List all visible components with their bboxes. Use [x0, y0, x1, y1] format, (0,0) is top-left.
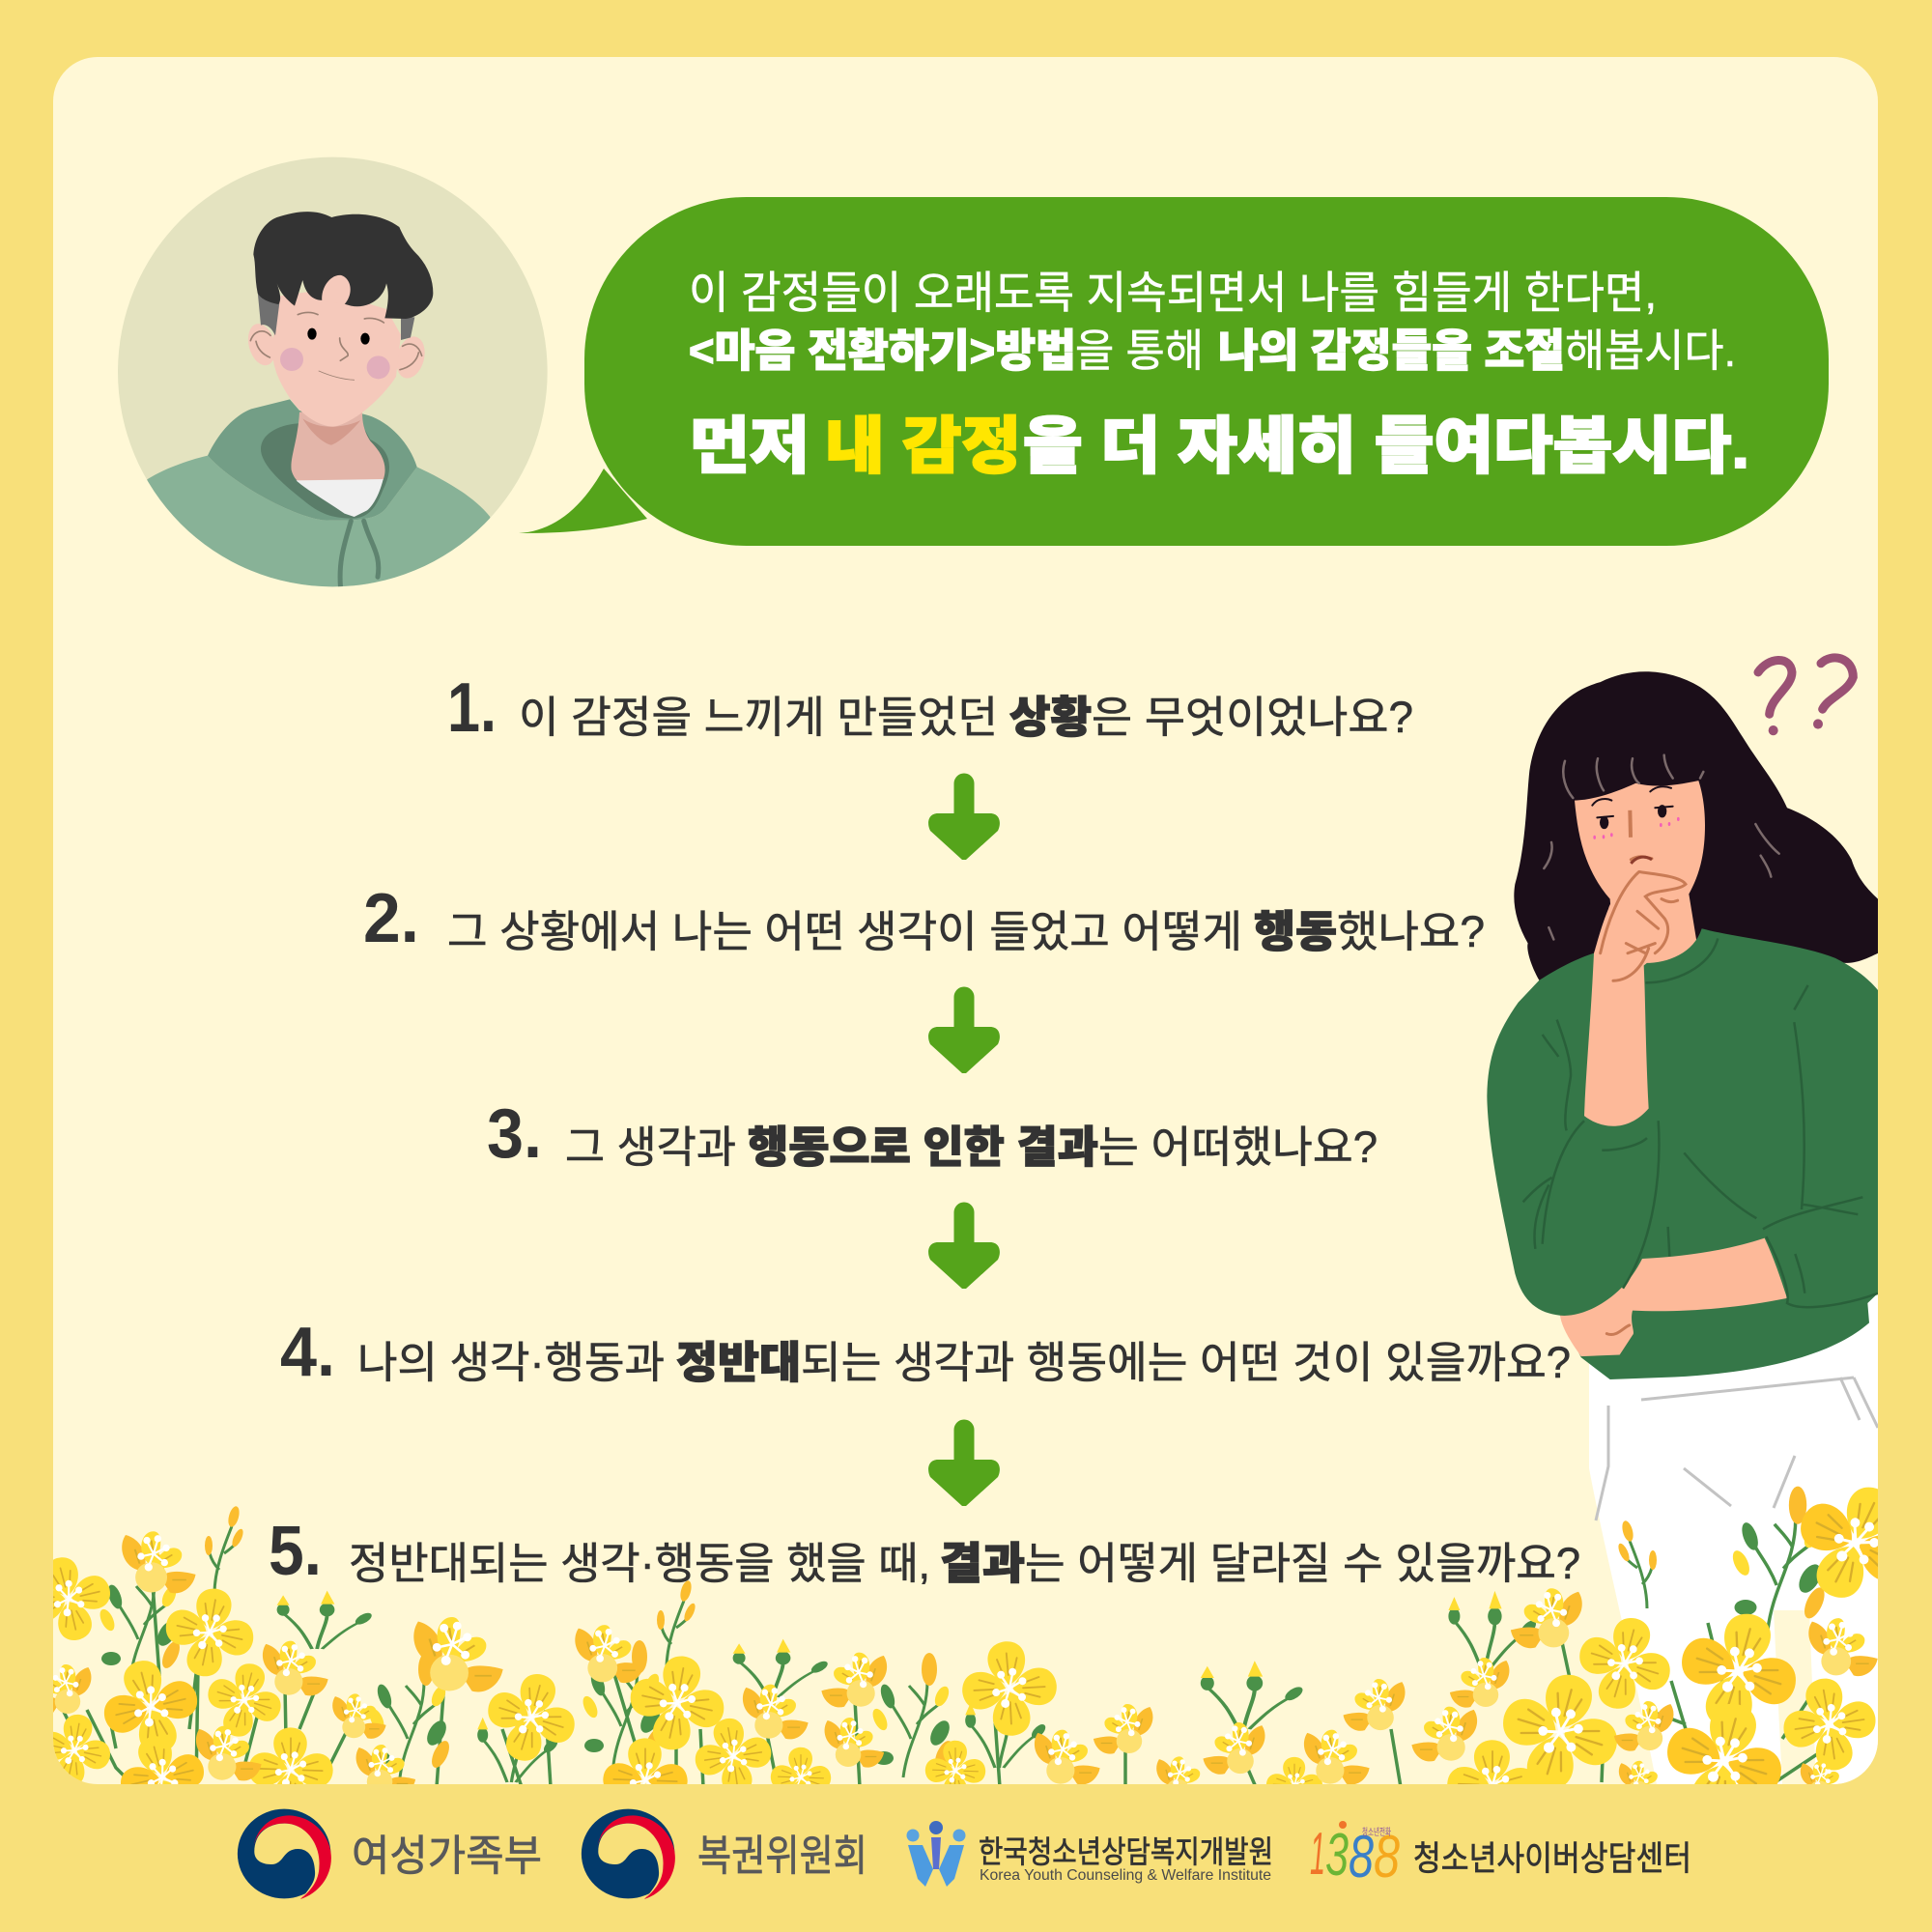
- flower field: [53, 1486, 1878, 1784]
- logo: 1388 청소년사이버상담센터: 8: [1349, 1824, 1374, 1890]
- logo: 1388 청소년사이버상담센터: 청소년전화: [1362, 1827, 1391, 1838]
- bubble line 3: 을 더 자세히 들여다봅시다.: [1023, 412, 1749, 481]
- logo: 여성가족부: 여성가족부: [352, 1833, 542, 1880]
- question 3: 행동으로 인한 결과: [748, 1122, 1098, 1172]
- question 2: 그 상황에서 나는 어떤 생각이 들었고 어떻게: [447, 907, 1242, 956]
- question 3: [487, 1095, 1378, 1173]
- bubble line 3: 먼저: [690, 412, 810, 481]
- woman's white trousers: [1589, 1294, 1878, 1784]
- stems: [62, 1592, 1816, 1784]
- question 1: 1.: [447, 669, 497, 747]
- logo: 한국청소년상담복지개발원: Korea Youth Counseling & Welfare Institute: [980, 1867, 1271, 1884]
- question 2: 했나요?: [1337, 907, 1485, 956]
- question 3: 3.: [487, 1095, 542, 1173]
- logo: 한국청소년상담복지개발원: [906, 1821, 1273, 1887]
- question 4: 정반대: [676, 1338, 801, 1387]
- question 1: 상황: [1009, 693, 1092, 742]
- logo: 여성가족부: [238, 1809, 542, 1899]
- question 4: 되는 생각과 행동에는 어떤 것이 있을까요?: [801, 1338, 1571, 1387]
- question 1: 이 감정을 느끼게 만들었던: [519, 693, 998, 742]
- logo: 1388 청소년사이버상담센터: 8: [1374, 1824, 1400, 1890]
- right flowers: [962, 1488, 1878, 1784]
- question 4: 나의 생각·행동과: [357, 1338, 665, 1387]
- question 4: 4.: [280, 1314, 335, 1391]
- left flowers: [16, 1531, 986, 1830]
- speech bubble: [519, 197, 1829, 546]
- woman figure: [1487, 671, 1878, 1379]
- question 4: [280, 1314, 1571, 1391]
- question 5: 5.: [269, 1513, 322, 1590]
- logo: 1388 청소년사이버상담센터: 1: [1310, 1821, 1325, 1888]
- arrow 3: [928, 1202, 1000, 1289]
- question 2: 2.: [363, 880, 419, 957]
- question 5: 결과: [940, 1539, 1025, 1588]
- sprigs: [97, 1487, 1829, 1782]
- arrow 1: [928, 773, 1000, 860]
- question 5: 는 어떻게 달라질 수 있을까요?: [1025, 1539, 1580, 1588]
- bubble line 2: <마음 전환하기>방법: [689, 326, 1076, 376]
- bubble line 3: 내 감정: [825, 412, 1021, 481]
- bubble line 2: 나의 감정들을 조절: [1218, 326, 1565, 376]
- question 2: 행동: [1254, 907, 1337, 956]
- bubble line 2: 해봅시다.: [1565, 326, 1736, 376]
- logo: 복권위원회: 복권위원회: [697, 1833, 867, 1880]
- question 5: [269, 1513, 1580, 1590]
- avatar: boy in green hoodie: [118, 157, 548, 592]
- arrow 4: [928, 1420, 1000, 1506]
- logo: 1388 청소년사이버상담센터: [1310, 1821, 1691, 1890]
- question 2: [363, 880, 1485, 957]
- icon: question marks: [1758, 658, 1853, 735]
- logo: 1388 청소년사이버상담센터: 청소년사이버상담센터: [1413, 1840, 1691, 1878]
- question 3: 그 생각과: [565, 1122, 736, 1172]
- question 5: 정반대되는 생각·행동을 했을 때,: [349, 1539, 930, 1588]
- question 3: 는 어떠했나요?: [1098, 1122, 1378, 1172]
- question 1: [447, 669, 1413, 747]
- logo: 복권위원회: [582, 1809, 867, 1899]
- arrow 2: [928, 987, 1000, 1073]
- logo: 1388 청소년사이버상담센터: 3: [1325, 1822, 1349, 1889]
- logo: 한국청소년상담복지개발원: 한국청소년상담복지개발원: [979, 1834, 1273, 1869]
- bubble line 1: 이 감정들이 오래도록 지속되면서 나를 힘들게 한다면,: [689, 268, 1657, 318]
- illustration: woman thinking: [1487, 671, 1878, 1784]
- question 1: 은 무엇이었나요?: [1092, 693, 1413, 742]
- bubble line 2: 을 통해: [1075, 326, 1204, 376]
